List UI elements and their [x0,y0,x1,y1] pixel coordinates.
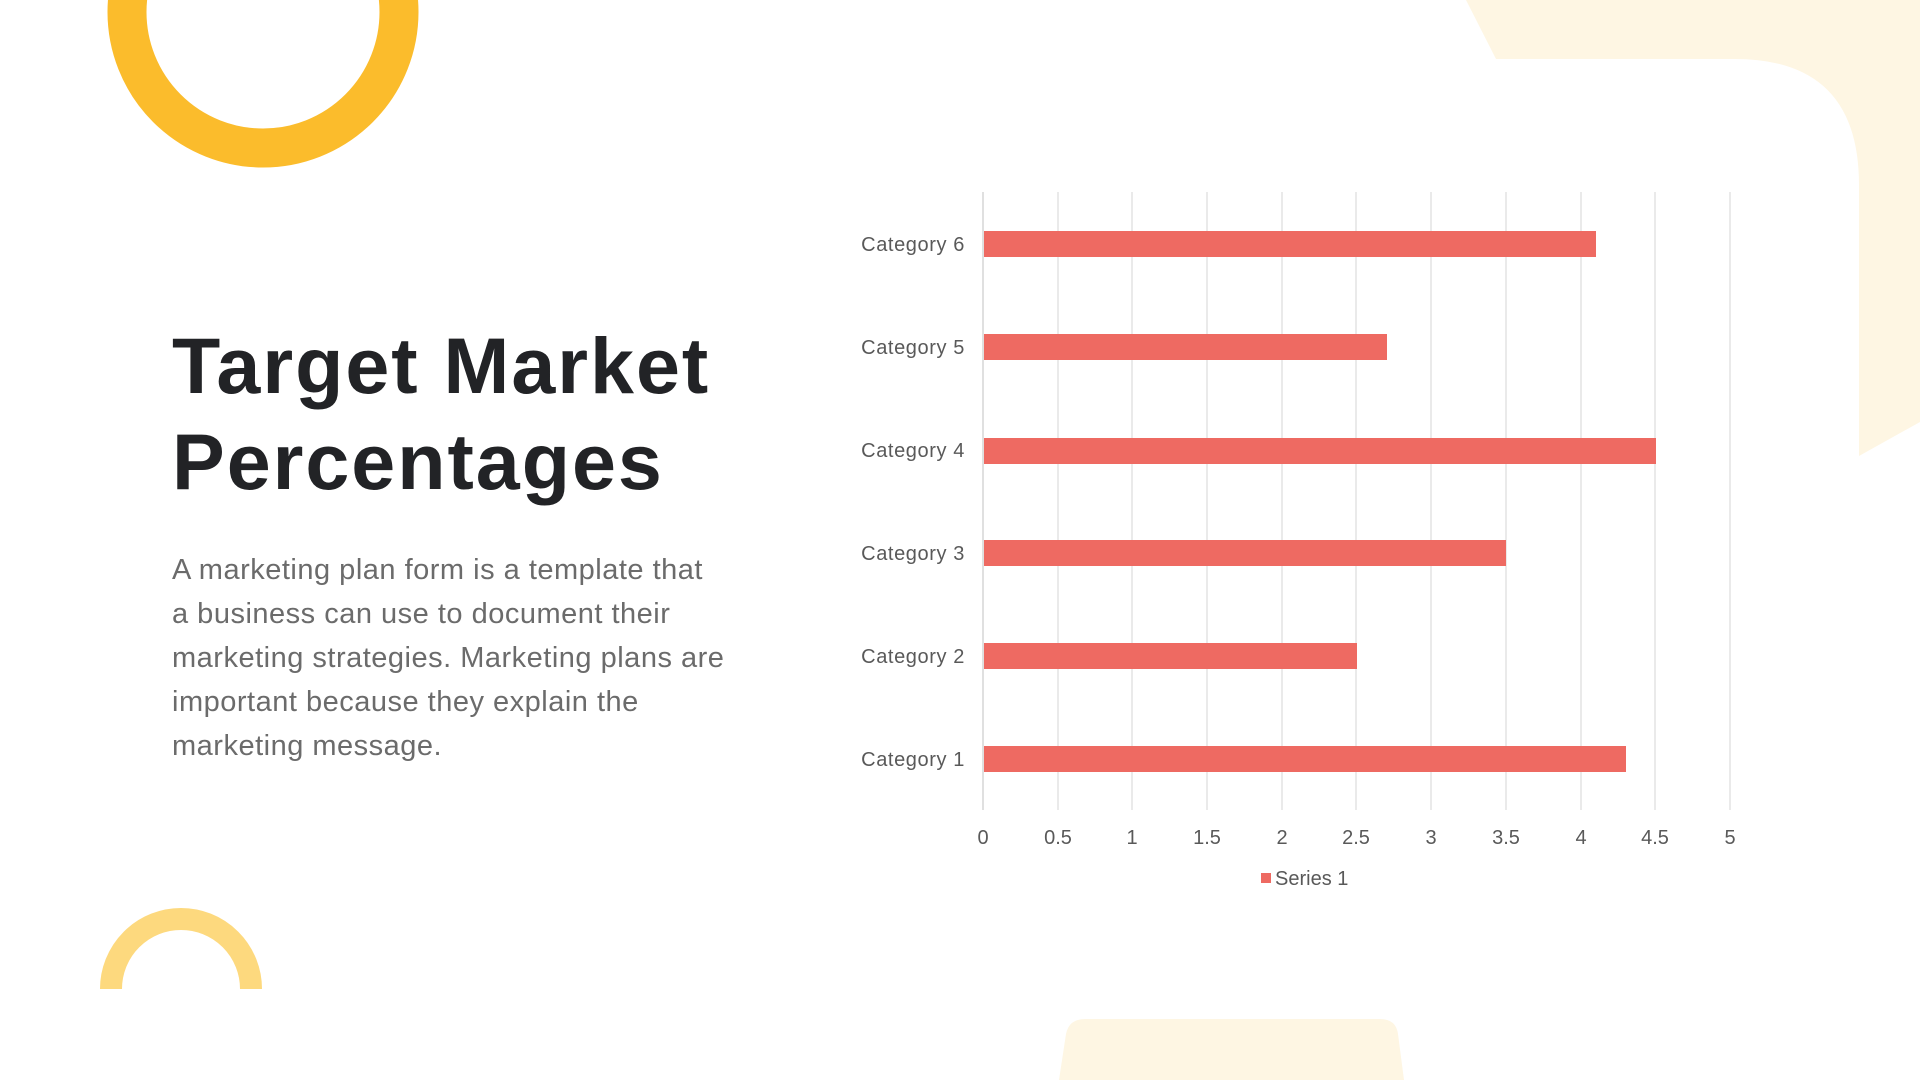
axis tick labels: 1 [1126,827,1138,849]
shape: top-right cream corner [1466,0,1920,456]
title [172,321,710,506]
axis tick labels: 4.5 [1641,827,1669,849]
axis tick labels: 3.5 [1492,827,1520,849]
category labels: Category 4 [861,440,965,462]
text block: description: A marketing plan form is a template that [172,554,703,586]
category labels: Category 6 [861,234,965,256]
axis tick labels: 2 [1276,827,1288,849]
axis tick labels: 5 [1724,827,1736,849]
category labels: Category 3 [861,543,965,565]
axis tick labels: 1.5 [1193,827,1221,849]
category labels: Category 2 [861,646,965,668]
text block: description: marketing strategies. Marketing plans are [172,642,724,674]
category labels: Category 5 [861,337,965,359]
icon: yellow ring top-left [127,0,399,148]
axis tick labels: 0.5 [1044,827,1072,849]
text block: description: important because they explain the [172,686,639,718]
text block: description: a business can use to document their [172,598,670,630]
axis tick labels: 3 [1425,827,1437,849]
category labels: Category 1 [861,749,965,771]
shape: bottom cream tab [1059,1019,1404,1080]
icon: small yellow arc bottom-left [111,919,251,989]
axis tick labels: 0 [977,827,989,849]
axis tick labels: 2.5 [1342,827,1370,849]
text block: description: marketing message. [172,730,442,762]
legend: Series 1 [1275,868,1348,890]
axis tick labels: 4 [1575,827,1587,849]
bars [984,231,1656,772]
category labels [861,234,965,771]
axis tick labels [977,827,1736,849]
text block: description [172,554,724,762]
title: Percentages [172,417,664,506]
title: Target Market [172,321,710,410]
